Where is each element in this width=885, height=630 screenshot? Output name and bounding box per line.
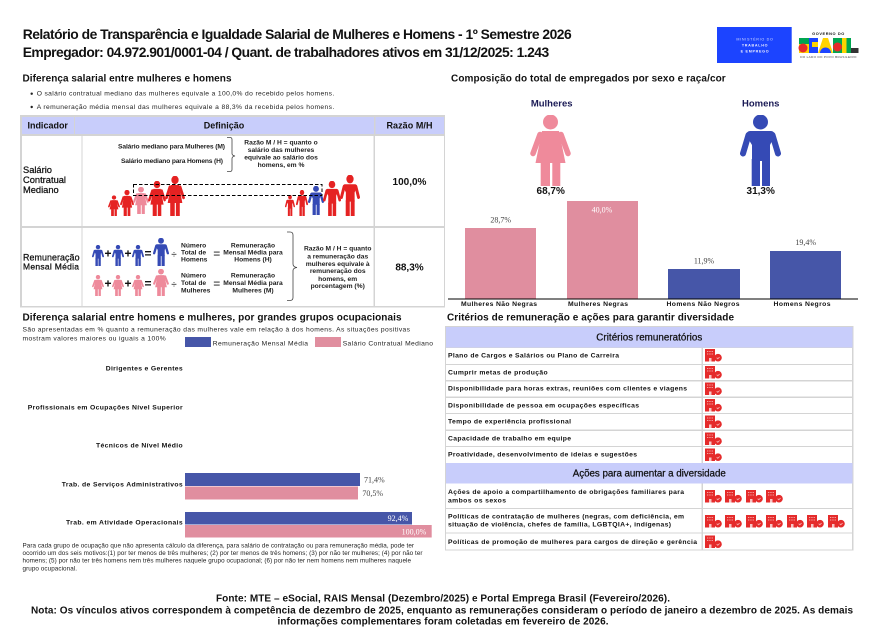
row: equipe — [448, 432, 722, 445]
bar chart: raça/cor — [448, 201, 858, 308]
formula: mulheres: Mensal Média para — [223, 280, 283, 287]
row: metas: Cumprir metas de produção — [448, 369, 548, 376]
row: horas extras — [448, 382, 722, 395]
icon group: homens ordenados por salário — [286, 175, 359, 216]
formula: homens: Número — [181, 243, 206, 250]
bullet list — [30, 91, 334, 111]
definition: salário mediano: salário das mulheres — [248, 147, 315, 154]
formula: homens: Homens — [181, 257, 208, 264]
table header: Definição — [204, 121, 245, 131]
formula: mulheres: Mulheres — [181, 287, 211, 294]
bars: atividade operacionais — [66, 512, 432, 538]
definition: razão remuneração: homens, em — [318, 276, 357, 283]
definition: salário mediano: Salário mediano para Mulheres (M) — [118, 144, 225, 150]
formula: homens: Remuneração — [231, 243, 275, 250]
value: salário contratual mediano: 100,0% — [393, 177, 427, 188]
horizontal bar chart: grupos ocupacionais — [28, 366, 432, 538]
definition: razão remuneração: remuneração dos — [310, 268, 366, 275]
formula: homens: Total de — [181, 250, 206, 257]
row: plano de cargos: Plano de Cargos e Salários ou Plano de Carreira — [448, 353, 619, 360]
table header: Indicador — [27, 121, 68, 131]
row: ocupações específicas — [448, 399, 722, 412]
formula: mulheres: Número — [181, 273, 206, 280]
section header: ações: Ações para aumentar a diversidade — [573, 468, 726, 480]
heading: critérios: Critérios de remuneração e ações para garantir diversidade — [447, 312, 734, 324]
footnote: homens; (5) por não ter três homens nem três mulheres naquele grupo ocupacional; (6) por não ter nem homens nem mulheres naquele — [22, 558, 411, 564]
row: experiência — [448, 416, 722, 428]
formula: homens: Homens (H) — [234, 257, 272, 264]
row: plano de cargos — [448, 349, 722, 362]
row: metas — [448, 366, 722, 378]
title: Empregador: 04.972.901/0001-04 / Quant. de trabalhadores ativos em 31/12/2025: 1.243 — [23, 44, 549, 60]
pictogram: mulheres: Mulheres — [531, 99, 573, 110]
bars: atividade operacionais: 100,0% — [402, 528, 427, 536]
footnote: Para cada grupo de ocupação que não apresenta cálculo da diferença, para salário de contratação ou para remuneração média, pode ter — [22, 542, 414, 549]
row: políticas de promoção — [448, 536, 722, 548]
formula: homens: = — [213, 246, 220, 260]
logo: governo do brasil: GOVERNO DO — [812, 31, 845, 36]
footnote: ocorrido um dos seis motivos:(1) por ter menos de três mulheres; (2) por ter menos de três homens; (3) por não ter mulheres; (4) por não ter — [22, 550, 422, 557]
formula: homens: Mensal Média para — [223, 250, 283, 257]
pictogram: mulheres — [531, 99, 573, 197]
value: remuneração mensal média: 88,3% — [395, 263, 424, 274]
bar: homens não negros: 11,9% — [694, 257, 715, 266]
bar: homens não negros: Homens Não Negros — [666, 301, 740, 308]
definition: razão remuneração: a remuneração das — [307, 253, 368, 260]
bar: mulheres negras: Mulheres Negras — [568, 301, 628, 308]
definition: salário mediano: Razão M / H = quanto o — [244, 140, 318, 146]
row label: salário contratual mediano: Salário — [23, 165, 52, 175]
definition: razão remuneração: mulheres equivale à — [306, 261, 370, 268]
formula: mulheres: = — [213, 276, 220, 290]
formula: homens: = — [144, 246, 152, 260]
bars: serviços administrativos: Trab. de Serviços Administrativos — [62, 482, 183, 489]
row: apoio compartilhamento: ambos os sexos — [448, 498, 506, 505]
bars: serviços administrativos: 70,5% — [362, 489, 383, 498]
formula: mulheres: = — [144, 276, 152, 290]
definition: salário mediano: homens, em % — [258, 162, 304, 169]
footer: Fonte: MTE – eSocial, RAIS Mensal (Dezembro/2025) e Portal Emprega Brasil (Fevereiro/2026). — [216, 594, 670, 605]
definition: salário mediano — [118, 138, 318, 172]
legend — [185, 337, 433, 348]
formula: homens — [93, 238, 283, 266]
bar: mulheres não negras — [461, 216, 537, 308]
row: apoio compartilhamento: Ações de apoio a compartilhamento de obrigações familiares para — [448, 489, 684, 496]
bar: mulheres não negras: 28,7% — [490, 216, 511, 225]
panel: critérios e ações — [445, 326, 854, 550]
bar: mulheres não negras: Mulheres Não Negras — [461, 301, 537, 308]
row: políticas de promoção: Políticas de promoção de mulheres para cargos de direção e gerência — [448, 539, 697, 546]
row label: remuneração mensal média — [23, 253, 80, 272]
row: equipe: Capacidade de trabalho em equipe — [448, 436, 571, 443]
formula: mulheres — [93, 269, 283, 296]
bar: homens não negros — [666, 257, 740, 308]
logo: governo do brasil — [798, 31, 858, 59]
row: proatividade — [448, 448, 722, 461]
formula: homens: + — [124, 246, 132, 260]
bullet list: O salário contratual mediano das mulheres equivale a 100,0% do recebido pelos homens. — [37, 91, 334, 98]
logo: ministério: TRABALHO — [742, 44, 768, 48]
table header — [27, 121, 432, 131]
legend: Salário Contratual Mediano — [343, 341, 433, 348]
footer: informações complementares foram coletadas em fevereiro de 2026. — [278, 616, 609, 627]
definition: razão remuneração: porcentagem (%) — [311, 283, 365, 290]
footnote — [22, 542, 422, 572]
icon group: mulheres ordenadas por salário — [109, 176, 184, 216]
formula: homens: ÷ — [171, 250, 177, 260]
row label: remuneração mensal média: Mensal Média — [23, 262, 79, 272]
bars: atividade operacionais: 92,4% — [388, 514, 409, 523]
formula: mulheres: Total de — [181, 280, 206, 287]
footnote: grupo ocupacional. — [22, 566, 77, 572]
logo: ministério — [717, 27, 792, 63]
logo: ministério: E EMPREGO — [741, 50, 769, 54]
row: horas extras: Disponibilidade para horas extras, reuniões com clientes e viagens — [448, 386, 687, 393]
row: proatividade: Proatividade, desenvolvimento de ideias e sugestões — [448, 452, 637, 459]
row label: remuneração mensal média: Remuneração — [23, 253, 80, 263]
row: apoio compartilhamento — [448, 489, 783, 505]
row: experiência: Tempo de experiência profissional — [448, 419, 571, 426]
formula: mulheres: ÷ — [171, 280, 177, 290]
pictogram: homens: Homens — [742, 99, 779, 110]
bullet list: A remuneração média mensal das mulheres equivale a 88,3% da recebida pelos homens. — [37, 104, 334, 111]
row label: salário contratual mediano — [23, 165, 66, 195]
panel: tabela de indicadores — [20, 115, 445, 308]
bars: atividade operacionais: Trab. em Atividade Operacionais — [66, 519, 183, 526]
text: explicação: mostram valores maiores ou iguais a 100% — [22, 336, 166, 343]
bar: homens negros: 19,4% — [795, 238, 816, 247]
text: explicação — [22, 327, 411, 343]
formula: mulheres: Mulheres (M) — [232, 287, 274, 294]
median marker — [134, 184, 322, 196]
formula: mulheres: + — [104, 276, 112, 290]
definition: razão remuneração: Razão M / H = quanto — [304, 245, 371, 252]
logo: ministério: MINISTÉRIO DO — [736, 36, 774, 42]
definition: razão remuneração — [287, 232, 371, 300]
footer: Nota: Os vínculos ativos correspondem à competência de dezembro de 2025, enquanto as remunerações consideram o período de janeiro a dezembro de 2025. As demais — [31, 605, 853, 616]
section header: critérios remuneratórios: Critérios remuneratórios — [596, 332, 702, 344]
bar: mulheres negras — [567, 201, 638, 308]
label: dirigentes: Dirigentes e Gerentes — [106, 366, 183, 373]
heading: composição: Composição do total de empregados por sexo e raça/cor — [451, 74, 726, 85]
bar: mulheres negras: 40,0% — [592, 206, 613, 215]
formula: homens: + — [104, 246, 112, 260]
row: políticas de contratação — [448, 513, 845, 529]
label: profissionais: Profissionais em Ocupações Nível Superior — [28, 405, 183, 412]
definition: salário mediano: equivale ao salário dos — [244, 154, 318, 161]
legend: Remuneração Mensal Média — [213, 341, 308, 348]
bars: serviços administrativos: 71,4% — [364, 476, 385, 484]
logo: governo do brasil: DO LADO DO POVO BRASILEIRO — [800, 55, 857, 59]
row: ocupações específicas: Disponibilidade de pessoa em ocupações específicas — [448, 403, 639, 410]
pictogram: mulheres: 68,7% — [537, 186, 565, 197]
title — [23, 26, 572, 60]
bar: homens negros — [770, 238, 841, 308]
formula: mulheres: Remuneração — [231, 273, 275, 280]
formula: mulheres: + — [124, 276, 132, 290]
text: explicação: São apresentadas em % quanto a remuneração das mulheres vale em relação à dos homens. As situações positivas — [22, 327, 411, 334]
row label: salário contratual mediano: Mediano — [23, 185, 59, 195]
row: políticas de contratação: situação de violência, chefes de família, LGBTQIA+, indígenas) — [448, 522, 671, 529]
table header: Razão M/H — [386, 121, 432, 131]
pictogram: homens — [742, 99, 779, 197]
heading: diferença salarial: Diferença salarial entre mulheres e homens — [22, 74, 232, 85]
bars: serviços administrativos — [62, 473, 385, 500]
bar: homens negros: Homens Negros — [774, 301, 831, 308]
row label: salário contratual mediano: Contratual — [23, 175, 66, 185]
pictogram: homens: 31,3% — [747, 186, 775, 197]
title: Relatório de Transparência e Igualdade Salarial de Mulheres e Homens - 1º Semestre 2026 — [23, 26, 572, 42]
footer — [31, 594, 853, 627]
definition: salário mediano: Salário mediano para Homens (H) — [121, 158, 223, 165]
heading: grupos ocupacionais: Diferença salarial entre homens e mulheres, por grandes grupos ocupacionais — [22, 313, 402, 324]
row: políticas de contratação: Políticas de contratação de mulheres (negras, com deficiência, em — [448, 513, 684, 520]
label: técnicos: Técnicos de Nível Médio — [96, 443, 183, 450]
